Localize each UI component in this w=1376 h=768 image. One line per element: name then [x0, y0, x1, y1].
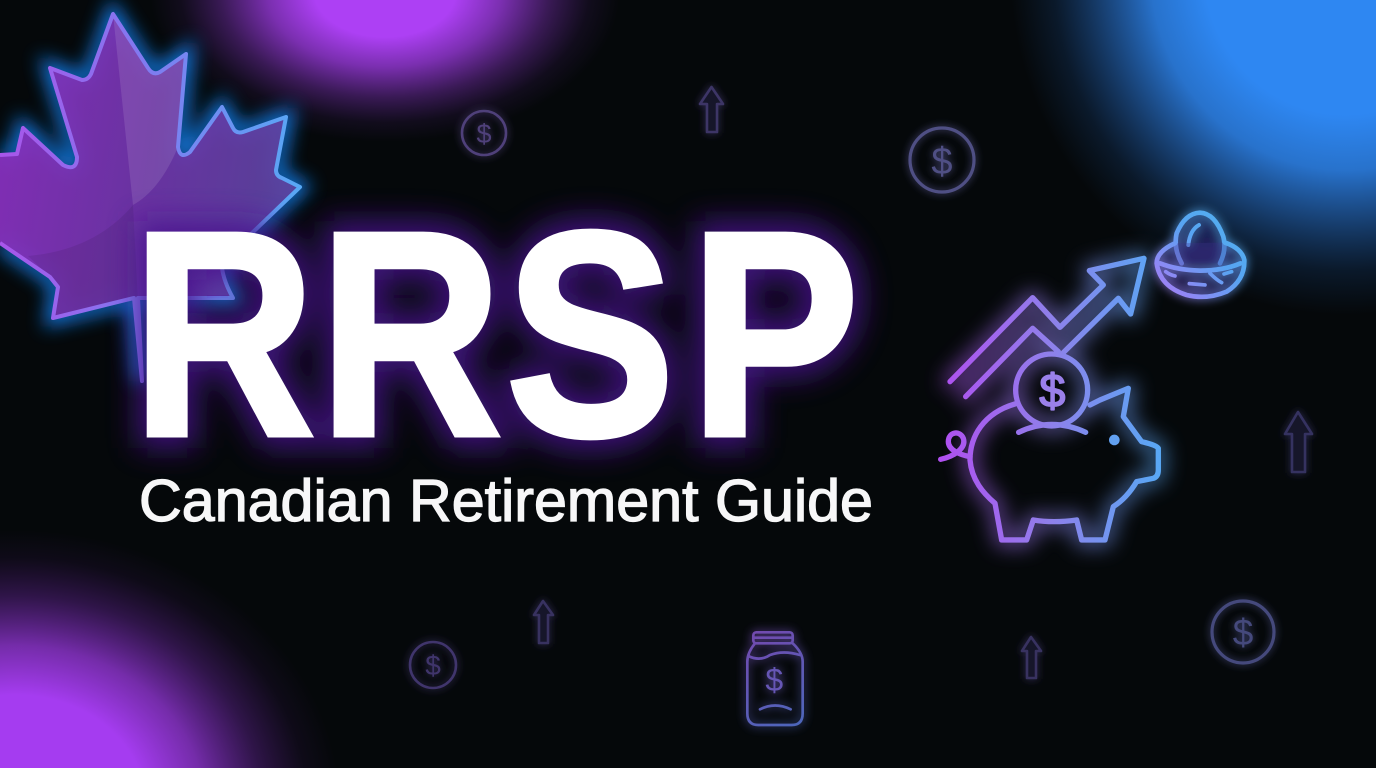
icon: dollar coin 1: [462, 111, 506, 155]
subtitle: Canadian Retirement Guide: [139, 468, 873, 534]
icon: dollar coin 4: $: [1233, 612, 1253, 653]
pig body: [941, 388, 1158, 540]
icon: arrow up 1: [700, 87, 723, 132]
icon: money jar: [747, 632, 803, 725]
icon: arrow up 2: [534, 601, 553, 643]
leaf shade: lower section: [28, 205, 142, 381]
icon: maple leaf: [0, 14, 300, 381]
icon: nest egg: [1157, 213, 1244, 297]
title: RRSP: [132, 170, 859, 497]
faint icons: [410, 87, 1312, 688]
icon: dollar coin 2: [910, 128, 974, 192]
pig glow: [950, 258, 1158, 540]
icon: dollar coin 3: $: [425, 650, 441, 681]
icon: money jar: $: [765, 662, 783, 698]
coin: $: [1039, 365, 1065, 417]
glow: blue top right: [1010, 0, 1376, 315]
illustration: piggy bank with growth arrow: [941, 258, 1158, 540]
icon: dollar coin 3: [410, 642, 456, 688]
icon: arrow up 4: [1285, 412, 1312, 472]
growth arrow: [950, 258, 1144, 397]
leaf highlight: upper right: [113, 14, 186, 205]
glow: purple bottom left: [0, 530, 340, 768]
coin: [1016, 354, 1088, 426]
icon: arrow up 3: [1022, 637, 1041, 678]
icon: dollar coin 1: $: [476, 119, 492, 149]
icon: dollar coin 4: [1212, 601, 1274, 663]
glow: title halo: RRSP: [132, 170, 859, 497]
glow: purple top: [150, 0, 620, 142]
icon: dollar coin 2: $: [931, 141, 953, 183]
